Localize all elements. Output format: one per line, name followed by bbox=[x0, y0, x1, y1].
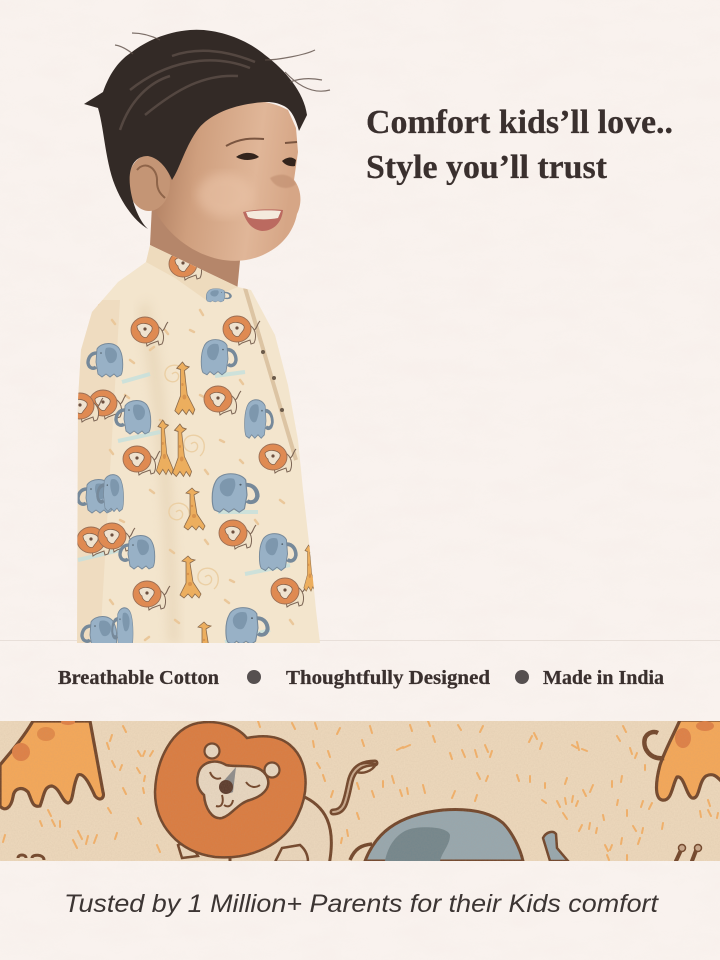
elephant bbox=[350, 763, 568, 861]
feature row: Thoughtfully Designed bbox=[286, 667, 490, 689]
eyes and brows bbox=[226, 139, 297, 166]
photo: smiling boy in printed kurta bbox=[66, 30, 330, 664]
feature row bbox=[58, 667, 664, 689]
printed shirt bbox=[77, 245, 320, 643]
giraffe foot, right bbox=[656, 720, 720, 800]
smile bbox=[243, 209, 283, 231]
giraffe foot, left bbox=[0, 721, 103, 809]
face bbox=[152, 100, 300, 261]
trust tagline: Tusted by 1 Million+ Parents for their Kids comfort bbox=[64, 890, 659, 918]
heading: Style you’ll trust bbox=[366, 149, 608, 186]
neck and arm skin bbox=[122, 205, 242, 643]
lion bbox=[155, 722, 375, 870]
grass marks bbox=[3, 721, 718, 860]
cheek and nose shading bbox=[197, 173, 296, 217]
feature row: Breathable Cotton bbox=[58, 667, 219, 689]
feature row: Made in India bbox=[543, 667, 664, 689]
heading bbox=[366, 104, 673, 186]
print banner bbox=[0, 719, 720, 870]
hair bbox=[84, 30, 330, 229]
heading: Comfort kids’ll love.. bbox=[366, 104, 673, 141]
ear bbox=[128, 155, 170, 211]
